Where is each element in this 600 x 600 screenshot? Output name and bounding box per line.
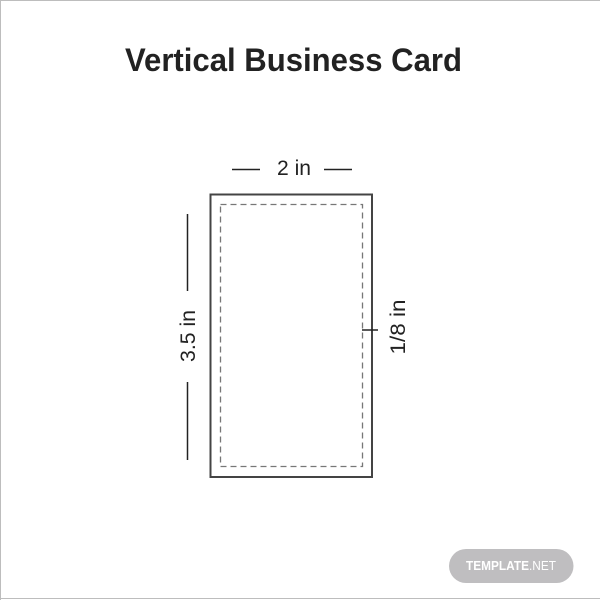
badge: Template.net watermark: TEMPLATE.NET xyxy=(466,558,556,573)
dimension: bleed 1/8 in xyxy=(362,300,410,354)
dimension: bleed 1/8 in: 1/8 in xyxy=(387,300,410,354)
diagram: business card outline xyxy=(210,194,372,477)
badge: Template.net watermark xyxy=(449,549,574,583)
safe area dashed line xyxy=(220,204,362,466)
card trim edge xyxy=(210,194,372,477)
dimension: width 2 in xyxy=(232,157,352,180)
dimension: height 3.5 in: 3.5 in xyxy=(177,310,200,362)
dimension: width 2 in: 2 in xyxy=(277,157,311,180)
title: Vertical Business Card xyxy=(125,42,462,78)
